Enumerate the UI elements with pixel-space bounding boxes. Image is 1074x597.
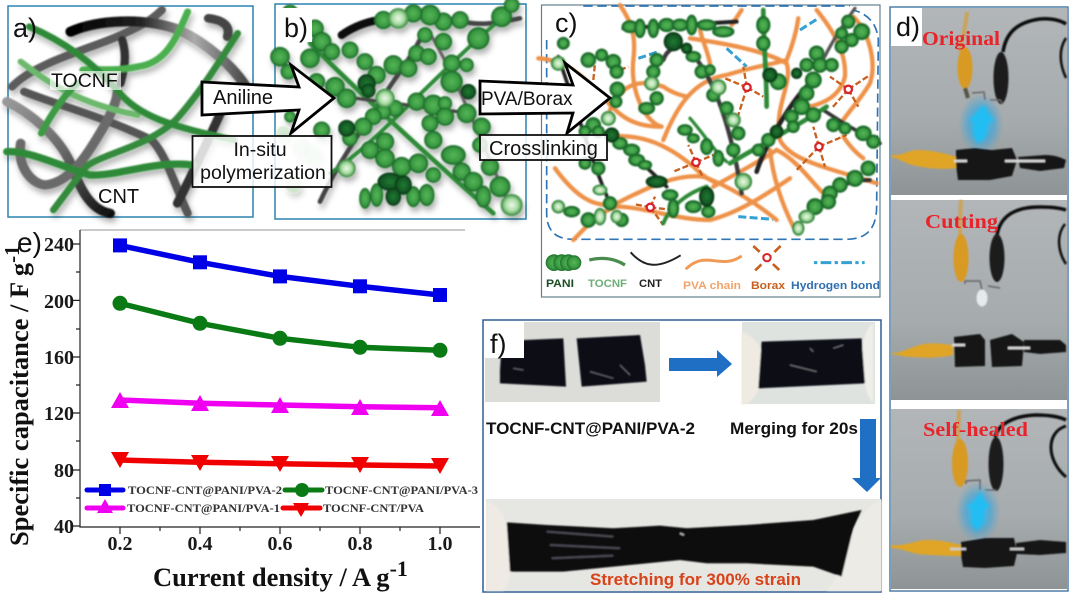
panel a: TOCNF and CNT network: [7, 6, 253, 217]
arrow: Aniline: [202, 65, 334, 133]
y tick labels: 40: [54, 516, 74, 538]
series: TOCNF-CNT/PVA: [111, 452, 449, 474]
legend labels: PANI: [546, 278, 574, 290]
arrow: to merged: [669, 350, 732, 377]
x tick labels: 0.2: [108, 533, 132, 555]
x tick labels: [108, 533, 452, 555]
panel b: PANI coated network: [271, 0, 526, 219]
series: TOCNF-CNT@PANI/PVA-3: [112, 296, 448, 358]
x tick labels: 1.0: [428, 533, 452, 555]
caption: Original: Original: [922, 28, 1000, 50]
icon: PANI: [546, 246, 865, 271]
d label: d): [896, 12, 920, 42]
axes: [73, 230, 480, 534]
x tick labels: 0.6: [268, 533, 292, 555]
hydrogen bonds: [638, 18, 818, 219]
e label: e): [17, 227, 42, 258]
PANI beads on strands: [271, 0, 522, 216]
legend labels: Hydrogen bond: [791, 280, 880, 292]
arrow: to stretched: [852, 419, 881, 492]
y tick labels: 240: [44, 234, 74, 256]
panel c: crosslinked hydrogel network: [538, 5, 880, 297]
legend: network components: [546, 246, 880, 292]
panel labels a b c: b): [284, 13, 308, 43]
legend labels: [546, 278, 880, 292]
dashed hydrogel boundary: [547, 6, 878, 239]
legend labels: PVA chain: [683, 280, 741, 292]
borax crosslinks: [593, 63, 870, 225]
chart legend: TOCNF-CNT@PANI/PVA-2: [128, 485, 282, 497]
x tick labels: 0.4: [188, 533, 212, 555]
caption: Self-healed: Self-healed: [923, 419, 1028, 441]
label: In-situ polymerization: In-situ: [233, 139, 287, 161]
f label: [485, 322, 524, 359]
PVA chains: [538, 5, 877, 240]
label: CNT: CNT: [98, 186, 139, 208]
f label: f): [490, 329, 506, 359]
panel labels a b c: a): [13, 13, 37, 43]
photo: cut pieces: [485, 322, 660, 402]
panel labels a b c: c): [555, 8, 578, 38]
series: TOCNF-CNT@PANI/PVA-2: [113, 238, 447, 302]
chart legend: TOCNF-CNT@PANI/PVA-1: [127, 503, 280, 515]
arrow: Aniline: Aniline: [213, 87, 273, 109]
photo: stretched sample: [486, 499, 882, 591]
photo: Cutting: [891, 200, 1067, 400]
panel e: specific capacitance chart: [0, 227, 480, 592]
panel f: hydrogel stretching photos: [483, 320, 882, 592]
chart legend: TOCNF-CNT@PANI/PVA-3: [325, 485, 478, 497]
caption: merging: Merging for 20s: [730, 419, 858, 438]
y tick labels: 80: [54, 460, 74, 482]
photo: Self-healed: [891, 409, 1067, 589]
photo: merged sample: [742, 322, 875, 404]
label: In-situ polymerization: [192, 136, 332, 187]
y axis title: -1: [0, 245, 24, 263]
chart legend: TOCNF-CNT/PVA: [323, 503, 425, 515]
x axis title: -1: [390, 556, 408, 581]
y tick labels: 120: [44, 403, 74, 425]
label: In-situ polymerization: polymerization: [200, 162, 326, 184]
arrow: PVA/Borax: [480, 63, 610, 133]
panel labels a b c: [13, 8, 578, 43]
legend labels: CNT: [639, 278, 662, 290]
chart legend: [87, 483, 478, 517]
legend labels: TOCNF: [588, 278, 627, 290]
caption: Cutting: Cutting: [925, 211, 998, 233]
y tick labels: 200: [44, 291, 74, 313]
series: TOCNF-CNT@PANI/PVA-1: [111, 392, 449, 416]
caption: sample name: TOCNF-CNT@PANI/PVA-2: [486, 419, 695, 438]
y tick labels: [44, 234, 74, 538]
y axis title: Specific capacitance / F g: [4, 263, 34, 546]
label: Crosslinking: Crosslinking: [489, 138, 598, 160]
arrow: PVA/Borax: PVA/Borax: [481, 89, 573, 110]
caption: stretching: Stretching for 300% strain: [590, 570, 801, 589]
x tick labels: 0.8: [348, 533, 372, 555]
legend labels: Borax: [751, 280, 785, 292]
d label: [891, 8, 922, 46]
x axis title: Current density / A g: [153, 562, 390, 592]
label: TOCNF: TOCNF: [51, 70, 118, 92]
PANI beaded chains: [552, 8, 880, 235]
y tick labels: 160: [44, 347, 74, 369]
panel d: self-healing LED photos: [890, 7, 1068, 591]
CNT and TOCNF strands: [7, 10, 248, 213]
photo: Original: [891, 8, 1067, 195]
